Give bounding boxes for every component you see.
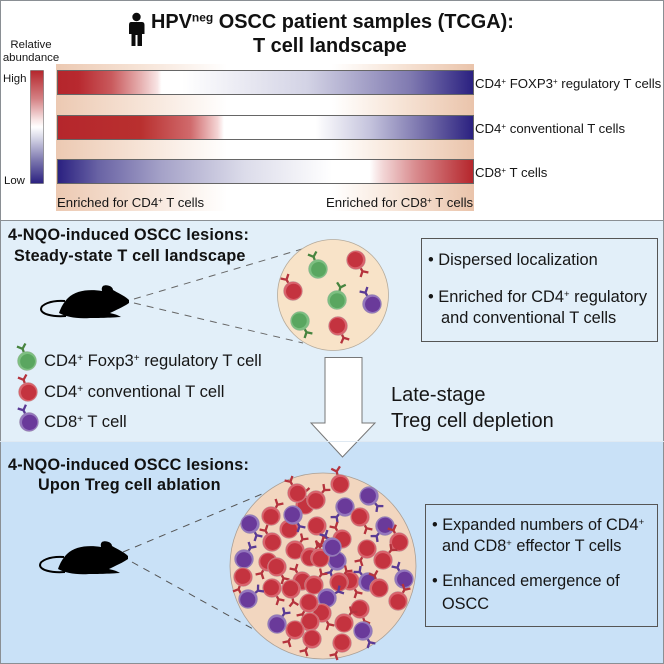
callout: Treg ablation findings — [426, 504, 658, 626]
callout: steady-state findings: and conventional T cells — [441, 309, 616, 327]
bar: CD8 T cells: CD8 — [475, 165, 501, 180]
bar: CD4 conventional T cells: CD4 — [475, 121, 501, 136]
callout: steady-state findings — [422, 238, 658, 342]
bar: CD4 FOXP3 regulatory T cells: FOXP3 — [506, 76, 553, 91]
callout: steady-state findings: + — [564, 289, 570, 300]
title: HPV — [151, 11, 192, 33]
callout: Treg ablation findings: effector T cells — [512, 537, 621, 555]
title — [151, 10, 514, 57]
heatmap background band — [56, 64, 474, 211]
label: late-stage Treg cell depletion: Treg cell depletion — [391, 410, 554, 432]
heading: steady-state: 4-NQO-induced OSCC lesions: — [8, 226, 249, 244]
legend: cell types: + — [77, 384, 83, 395]
icon: mouse Treg ablation — [40, 541, 128, 574]
bar: CD4 FOXP3 regulatory T cells: CD4 — [475, 76, 501, 91]
legend: cell types: + — [77, 414, 83, 425]
legend: relative abundance: Relative — [10, 39, 52, 51]
legend: cell types: conventional T cell — [83, 382, 224, 401]
bar: CD8 T cells: T cells — [506, 165, 548, 180]
callout: Treg ablation findings: • Enhanced emergence of — [432, 572, 620, 590]
icon: mouse steady-state — [41, 285, 129, 318]
panel: steady-state background — [0, 221, 664, 441]
legend: relative abundance — [3, 39, 59, 187]
heading: steady-state — [8, 226, 249, 265]
legend: cell types: + — [134, 353, 140, 364]
axis label: enriched for CD8: T cells — [432, 195, 474, 210]
legend: cell types: T cell — [83, 412, 127, 431]
icon: human patient — [129, 13, 144, 46]
legend: cell types: CD4 — [44, 382, 77, 401]
legend: relative abundance: abundance — [3, 52, 59, 64]
bar: CD4 conventional T cells — [58, 116, 625, 140]
axis label: enriched for CD4: + — [158, 196, 163, 205]
legend: cell types — [12, 342, 262, 435]
callout: Treg ablation findings: and CD8 — [442, 537, 506, 555]
bar: CD8 T cells: + — [501, 166, 506, 175]
legend: cell types: + — [77, 353, 83, 364]
bar: CD4 FOXP3 regulatory T cells: regulatory T cells — [558, 76, 662, 91]
callout: Treg ablation findings: • Expanded numbers of CD4 — [432, 516, 639, 534]
legend: relative abundance: Low — [4, 175, 26, 187]
dashed zoom lines: steady-state — [134, 249, 303, 343]
callout: steady-state findings: regulatory — [570, 288, 648, 306]
heading: Treg ablation — [8, 456, 249, 494]
axis label: enriched for CD8: Enriched for CD8 — [326, 195, 427, 210]
legend: relative abundance: High — [3, 73, 26, 85]
bar: CD4 conventional T cells: + — [501, 122, 506, 131]
axis label: enriched for CD4: T cells — [163, 195, 205, 210]
title: T cell landscape — [253, 35, 407, 57]
legend: cell types: regulatory T cell — [140, 351, 262, 370]
label: late-stage Treg cell depletion: Late-stage — [391, 384, 486, 406]
bar: CD4 conventional T cells: conventional T cells — [506, 121, 625, 136]
panel: Treg ablation background — [0, 442, 664, 664]
bar: CD4 FOXP3 regulatory T cells: + — [501, 77, 506, 86]
bar: CD4 FOXP3 regulatory T cells: + — [553, 77, 558, 86]
dashed zoom lines: Treg ablation — [123, 494, 262, 629]
callout: Treg ablation findings: + — [639, 517, 645, 528]
legend: cell types: CD4 — [44, 351, 77, 370]
bar: CD8 T cells — [58, 160, 548, 184]
callout: Treg ablation findings: OSCC — [442, 595, 489, 613]
legend: cell types: CD8 — [44, 412, 77, 431]
panel: human TCGA landscape — [0, 0, 664, 220]
arrow: late-stage depletion — [311, 358, 375, 457]
tumour lesion: steady-state — [276, 240, 388, 350]
callout: steady-state findings: • Enriched for CD4 — [428, 288, 564, 306]
title: neg — [192, 10, 213, 24]
legend: cell types: Foxp3 — [83, 351, 134, 370]
axis label: enriched for CD8: + — [427, 196, 432, 205]
callout: Treg ablation findings: + — [506, 538, 512, 549]
axis label: enriched for CD4: Enriched for CD4 — [57, 195, 158, 210]
tumour lesion: Treg ablation — [228, 465, 417, 662]
heading: steady-state: Steady-state T cell landscape — [14, 247, 246, 265]
label: late-stage Treg cell depletion — [391, 384, 554, 432]
title: OSCC patient samples (TCGA): — [213, 11, 514, 33]
callout: steady-state findings: • Dispersed localization — [428, 251, 598, 269]
heading: Treg ablation: Upon Treg cell ablation — [38, 476, 221, 494]
heading: Treg ablation: 4-NQO-induced OSCC lesions: — [8, 456, 249, 474]
bar: CD4 FOXP3 regulatory T cells — [58, 70, 662, 94]
